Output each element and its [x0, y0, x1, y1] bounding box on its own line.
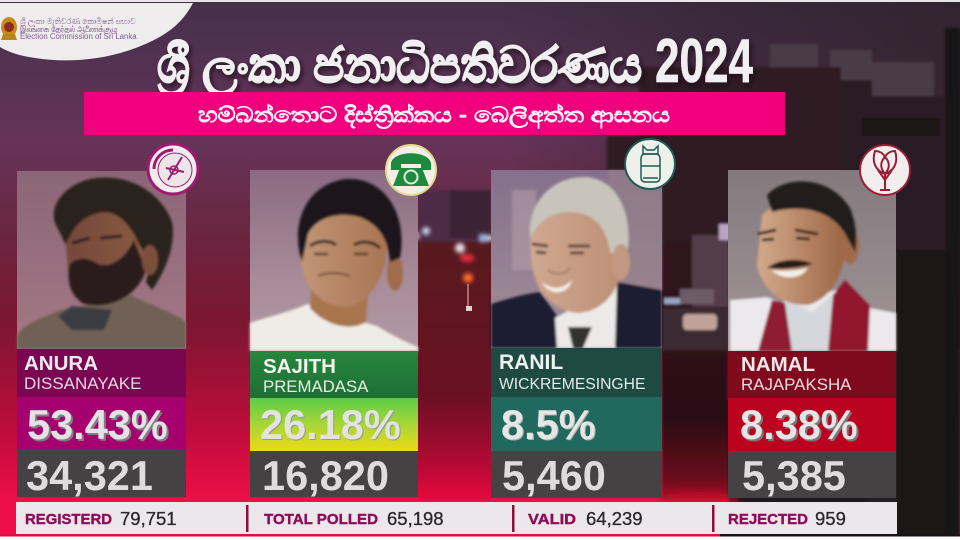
- summary bar: [16, 502, 897, 534]
- subtitle banner: හම්බන්තොට දිස්ත්‍රික්කය - බෙලිඅත්ත ආසනය: [198, 103, 670, 130]
- title: 2024: [655, 27, 753, 96]
- logo panel: Election Commission of Sri Lanka: [0, 3, 193, 60]
- logo text: [20, 16, 137, 41]
- stat value: rejected: 959: [815, 508, 846, 529]
- vote count: 5,385: [742, 452, 846, 499]
- name block: SAJITH: [263, 355, 336, 378]
- vote count: 16,820: [262, 452, 389, 499]
- vote percentage: 8.5%: [502, 402, 597, 449]
- stat: rejected: REJECTED: [728, 511, 808, 528]
- name block: [250, 351, 418, 398]
- vote percentage: 26.18%: [260, 401, 401, 448]
- name block: RAJAPAKSHA: [741, 375, 852, 394]
- vote count: [491, 451, 662, 499]
- portrait: Namal: [728, 170, 896, 351]
- vote percentage: 53.43%: [29, 403, 170, 450]
- portrait: Anura: [17, 171, 186, 349]
- logo text: இலங்கை தேர்தல் ஆணைக்குழு: [20, 25, 118, 34]
- name block: WICKREMESINGHE: [499, 376, 645, 393]
- stat: valid: VALID: [528, 511, 576, 528]
- panel: Ranil Wickremesinghe: [491, 139, 675, 499]
- stat: total polled: TOTAL POLLED: [264, 511, 378, 528]
- stat value: total polled: 65,198: [387, 508, 444, 529]
- icon: lotus bud symbol: [860, 145, 910, 195]
- logo text: ශ්‍රී ලංකා මැතිවරණ කොමිෂන් සභාව: [20, 16, 136, 27]
- name block: PREMADASA: [263, 377, 369, 396]
- icon: telephone symbol: [386, 145, 436, 195]
- panel: Namal Rajapaksha: [728, 145, 910, 499]
- name block: [17, 349, 186, 397]
- panel: Sajith Premadasa: [250, 145, 436, 499]
- stat value: valid: 64,239: [586, 508, 643, 529]
- vote percentage: 8.5%: [501, 401, 596, 448]
- name block: NAMAL: [741, 353, 815, 376]
- name block: DISSANAYAKE: [24, 374, 141, 393]
- icon: gas cylinder symbol: [625, 139, 675, 189]
- portrait: Ranil: [491, 170, 662, 348]
- vote count: 5,460: [502, 452, 606, 499]
- subtitle banner: [84, 92, 785, 135]
- icon: national emblem: [1, 17, 17, 40]
- vote percentage: 26.18%: [261, 402, 402, 449]
- icon: compass clock symbol: [148, 144, 198, 194]
- vote percentage: [491, 397, 662, 451]
- name block: [491, 348, 662, 397]
- vote count: [728, 451, 896, 499]
- stat: registered: REGISTERD: [25, 511, 112, 528]
- panel: Anura Dissanayake: [17, 144, 198, 499]
- vote percentage: 8.38%: [742, 403, 860, 450]
- name block: ANURA: [24, 352, 98, 375]
- title: ශ්‍රී ලංකා ජනාධිපතිවරණය: [157, 37, 642, 97]
- vote percentage: 53.43%: [27, 401, 168, 448]
- stat value: registered: 79,751: [120, 508, 177, 529]
- vote percentage: 8.38%: [740, 401, 858, 448]
- logo text: Election Commission of Sri Lanka: [20, 32, 137, 41]
- name block: [728, 351, 896, 398]
- portrait: Sajith: [250, 170, 418, 351]
- name block: RANIL: [499, 351, 563, 374]
- vote count: 34,321: [26, 452, 153, 499]
- vote percentage: [728, 398, 896, 451]
